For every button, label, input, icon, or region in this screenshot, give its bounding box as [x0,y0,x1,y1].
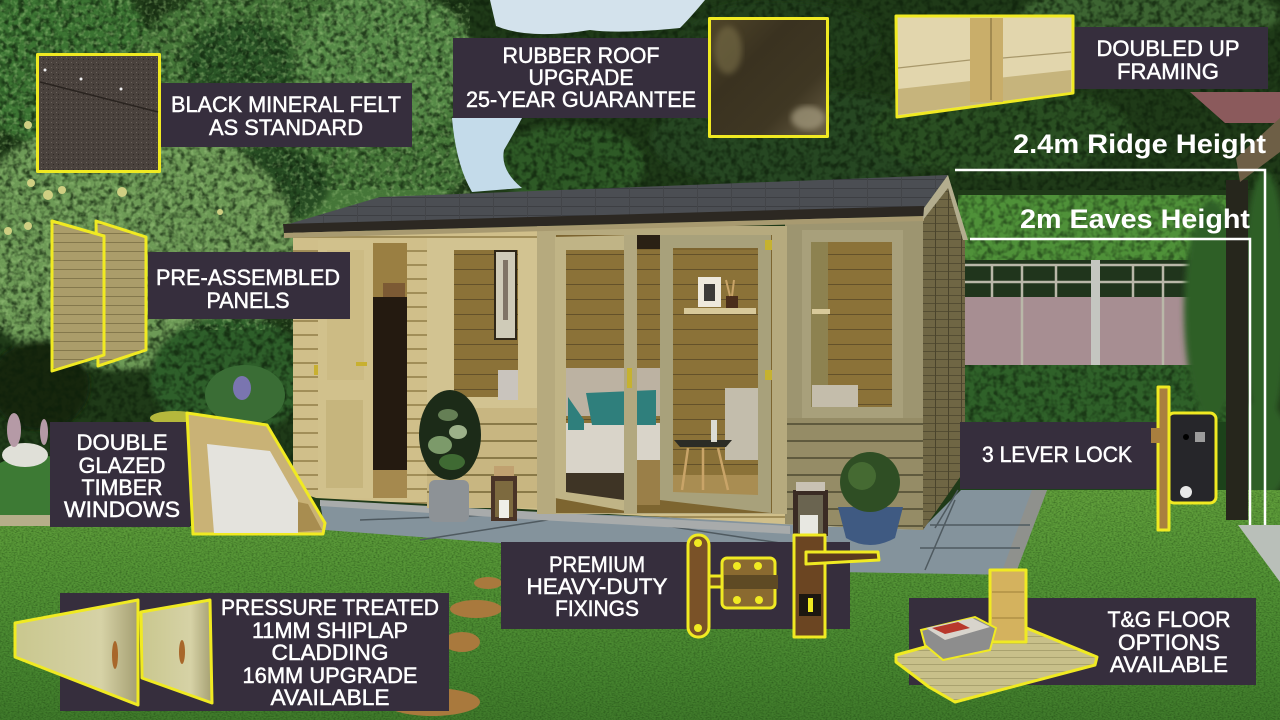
callout: pre-assembled panels: PRE-ASSEMBLED [156,265,340,290]
icon: door handle [794,535,879,637]
lantern, right [793,482,828,536]
fence panels and post [962,260,1210,368]
climbing vines [1184,170,1280,500]
callout: heavy-duty fixings: FIXINGS [555,596,639,621]
callout: pressure treated cladding: CLADDING [272,640,388,665]
callout: pressure treated cladding: PRESSURE TREATED [221,595,439,620]
first window [427,238,537,408]
callout: heavy-duty fixings: PREMIUM [549,552,645,577]
left door frame [555,235,637,513]
lantern, left [491,466,517,521]
yellow blossoms [4,121,223,235]
callout: T&G floor options [896,570,1256,702]
icon: hinge [688,535,778,637]
dark gap behind fence trellis [958,260,1208,298]
callout: pressure treated cladding: 11MM SHIPLAP [252,618,408,643]
icon: lock case [1151,387,1216,530]
topiary in blue pot [838,452,903,545]
callout: double glazed windows: GLAZED [78,453,166,478]
callout: doubled up framing [896,16,1268,117]
plant and pot, left [419,390,481,522]
callout: 3 lever lock: 3 LEVER LOCK [982,442,1132,467]
left flower bed [0,365,285,530]
callout: black mineral felt: AS STANDARD [209,115,363,140]
central double doors and interior [555,235,772,513]
callout: pre-assembled panels: PANELS [206,288,290,313]
callout: T&G floor options: T&G FLOOR [1108,607,1230,632]
pergola post and beam [1226,118,1280,520]
callout: black mineral felt [38,54,412,172]
right window [802,230,903,418]
callout: rubber roof [453,18,828,136]
left door and dark opening [314,240,407,498]
callout: heavy-duty fixings: HEAVY-DUTY [526,574,668,599]
callout: 3 lever lock [960,387,1216,530]
callout: double glazed windows: WINDOWS [64,497,180,522]
icon: framing corner [896,16,1073,117]
roof [282,175,968,240]
shed front wall [293,231,923,530]
icon: cladding boards [15,600,212,705]
icon: felt swatch [38,54,160,172]
height dimension lines [955,170,1265,525]
icon: floor kit [896,570,1097,702]
callout: pressure treated cladding [15,593,449,711]
roof of neighbouring house [1190,92,1280,123]
tall hedge [958,195,1238,265]
callout: rubber roof: UPGRADE [528,65,634,90]
callout: doubled up framing: FRAMING [1117,59,1219,84]
icon: window section [187,413,325,534]
label: ridge height: 2.4m Ridge Height [1013,129,1266,159]
callout: doubled up framing: DOUBLED UP [1096,36,1240,61]
callout: black mineral felt: BLACK MINERAL FELT [171,92,401,117]
sky [452,0,705,192]
callout: pressure treated cladding: 16MM UPGRADE [242,663,418,688]
shed side wall [923,178,965,530]
callout: pre-assembled panels [52,221,350,371]
right door frame [660,235,771,513]
callout: double glazed windows [50,413,325,534]
callout: heavy-duty fixings [501,535,879,637]
callout: double glazed windows: DOUBLE [76,430,168,455]
shed [282,175,968,530]
low hedge [960,365,1235,425]
icon: wall panels [52,221,146,371]
callout: rubber roof: 25-YEAR GUARANTEE [466,87,696,112]
callout: rubber roof: RUBBER ROOF [502,43,660,68]
callout: pressure treated cladding: AVAILABLE [270,685,390,710]
icon: rubber swatch [710,18,828,136]
label: eaves height: 2m Eaves Height [1020,204,1250,234]
callout: T&G floor options: AVAILABLE [1110,652,1228,677]
patio paving [320,490,1047,575]
callout: double glazed windows: TIMBER [82,475,162,500]
lawn [0,490,1280,720]
callout: T&G floor options: OPTIONS [1118,630,1220,655]
